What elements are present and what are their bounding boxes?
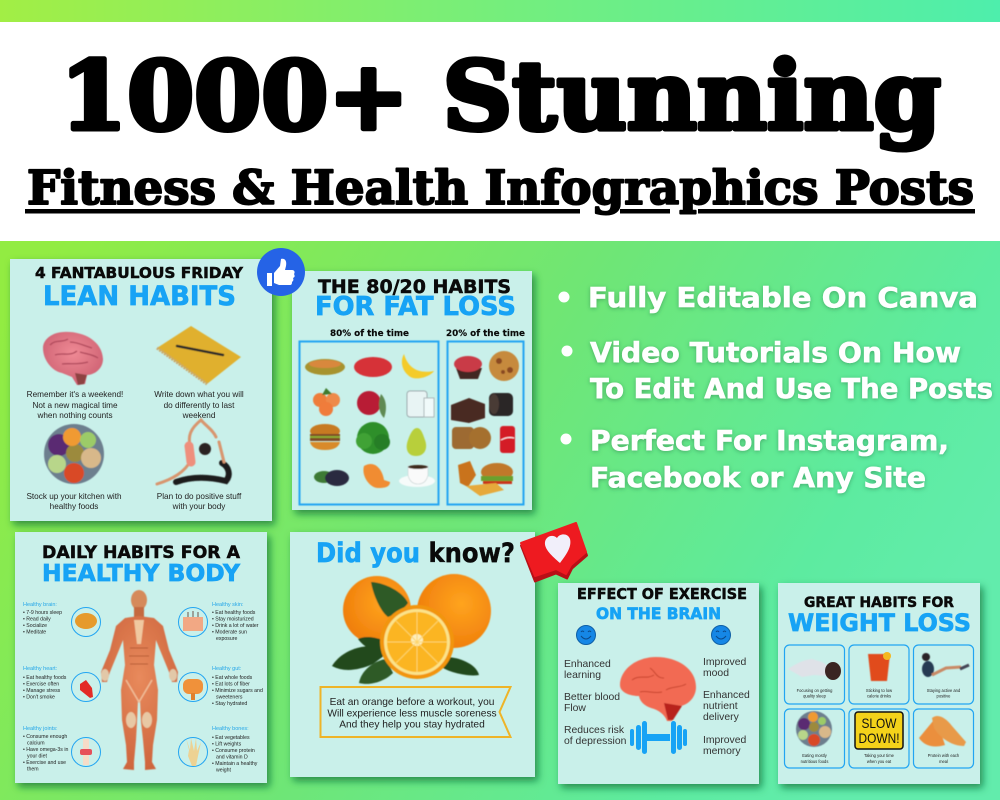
bullet: perfect for instagram: Perfect For Instagram,	[590, 424, 949, 457]
icon: joint circle	[72, 738, 100, 766]
card: nutritious foods: Eating mostly	[802, 753, 828, 758]
icon: right smiley	[712, 626, 730, 644]
text: stock kitchen: Stock up your kitchen with	[26, 492, 122, 501]
bullet: video tutorials	[562, 336, 993, 405]
text: positive stuff: with your body	[172, 502, 226, 511]
heading: lean habits: LEAN HABITS	[43, 281, 236, 312]
card: quality sleep: Focusing on getting	[797, 688, 833, 693]
icon: healthy plate	[44, 424, 104, 484]
text: write down: do differently to last	[164, 401, 235, 410]
text: healthy brain: Healthy brain:	[23, 602, 57, 608]
text: left benefits: of depression	[564, 736, 627, 747]
text: left benefits: Better blood	[564, 692, 620, 703]
card: slow down: Taking your time	[864, 753, 895, 758]
text: healthy gut: • Eat lots of fiber	[212, 682, 250, 688]
bullet: canva: Fully Editable On Canva	[588, 281, 978, 314]
text: write down: Write down what you will	[154, 390, 244, 399]
text: healthy bones: • Eat vegetables	[212, 735, 250, 741]
text: positive stuff	[157, 492, 242, 511]
icon: skin circle	[178, 608, 208, 636]
text: right benefits: memory	[703, 746, 741, 757]
sign: slow down	[855, 712, 903, 749]
text: write down: weekend	[182, 411, 216, 420]
heading: healthy body: HEALTHY BODY	[42, 561, 240, 587]
text: healthy gut: • Stay hydrated	[212, 701, 247, 707]
text: healthy joints: calcium	[27, 740, 45, 746]
image: oranges	[332, 574, 491, 684]
panel: did you know	[290, 532, 535, 777]
text: left benefits: Flow	[564, 703, 586, 714]
white title banner	[0, 22, 1000, 241]
bullet: perfect for instagram: Facebook or Any Site	[590, 461, 926, 494]
heading: daily habits: DAILY HABITS FOR A	[42, 543, 241, 563]
background gradient	[0, 240, 1000, 800]
callout: orange fact ribbon: Eat an orange before a workout, you	[330, 697, 494, 708]
bullet list: features	[558, 281, 993, 494]
icon: dumbbell	[630, 721, 687, 754]
callout: orange fact ribbon	[320, 687, 510, 737]
callout: orange fact ribbon: Will experience less muscle soreness	[327, 708, 497, 720]
icon: red brain	[620, 657, 696, 721]
icon: gut circle	[178, 672, 208, 702]
text: healthy joints: your diet	[27, 754, 47, 760]
text: positive stuff: Plan to do positive stuff	[157, 492, 242, 501]
text: healthy skin: • Moderate sun	[212, 630, 247, 636]
heading: weight loss: WEIGHT LOSS	[788, 609, 971, 637]
text: right benefits: Enhanced	[703, 690, 750, 701]
text: healthy bones: • Maintain a healthy	[212, 761, 258, 767]
text: left benefits: Reduces risk	[564, 725, 625, 736]
text: left benefits	[564, 659, 627, 747]
text: healthy joints: • Exercise and use	[23, 760, 66, 766]
icon: pink brain	[43, 332, 103, 385]
bullet: video tutorials: Video Tutorials On How	[590, 336, 961, 369]
text: right benefits: Improved	[703, 657, 747, 668]
text: healthy brain: • 7-9 hours sleep	[23, 610, 62, 616]
bullet: perfect for instagram	[560, 424, 949, 494]
text: weekend reminder: when nothing counts	[36, 411, 113, 420]
icon: brain circle	[72, 608, 100, 636]
text: healthy bones: • Consume protein	[212, 748, 255, 754]
card: protein each meal: Protein with each	[928, 753, 960, 758]
heading: great habits for: GREAT HABITS FOR	[804, 595, 954, 611]
text: healthy gut: • Eat whole foods	[212, 675, 253, 681]
text: healthy joints: • Consume enough	[23, 734, 67, 740]
text: healthy bones: • Lift weights	[212, 742, 242, 748]
text: healthy skin: • Eat healthy foods	[212, 610, 256, 616]
text: healthy brain: • Read daily	[23, 616, 51, 622]
label: 20 percent: 20% of the time	[446, 329, 525, 339]
text: write down	[154, 390, 244, 420]
panel: healthy body	[15, 532, 267, 783]
text: healthy skin: exposure	[216, 636, 237, 642]
card: quality sleep: quality sleep	[803, 694, 827, 698]
heading: the 80/20 habits: THE 80/20 HABITS	[318, 276, 511, 298]
text: healthy heart: • Don't smoke	[23, 694, 55, 700]
panel: 80/20 habits	[292, 271, 532, 510]
heading: did you know: Did you know?	[316, 538, 515, 569]
card: quality sleep	[784, 645, 844, 704]
panel: effect of exercise	[558, 583, 759, 784]
text: healthy gut: Healthy gut:	[212, 666, 242, 672]
top gradient strip	[0, 0, 1000, 22]
card: low calorie drinks: Sticking to low	[866, 688, 892, 693]
text: healthy skin: • Drink a lot of water	[212, 623, 259, 629]
text: healthy bones: weight	[216, 768, 232, 774]
panel: weight loss habits	[778, 583, 980, 784]
card: slow down: when you eat	[867, 759, 892, 764]
heading: on the brain: ON THE BRAIN	[596, 604, 721, 623]
title: 1000+ Stunning	[60, 41, 941, 152]
label: 80 percent: 80% of the time	[330, 329, 409, 339]
text: right benefits: mood	[703, 668, 729, 679]
bullet: video tutorials: To Edit And Use The Posts	[590, 372, 993, 405]
text: right benefits: Improved	[703, 735, 747, 746]
card: slow down	[849, 709, 909, 768]
callout: orange fact ribbon: And they help you stay hydrated	[339, 720, 485, 730]
text: healthy skin	[212, 602, 259, 642]
text: healthy joints	[23, 726, 68, 772]
text: weekend reminder	[27, 390, 123, 420]
text: healthy brain: • Meditate	[23, 630, 46, 636]
text: weekend reminder: Remember it's a weekend!	[27, 390, 123, 399]
text: healthy bones: Healthy bones:	[212, 726, 249, 732]
panel: lean habits	[10, 259, 272, 521]
card: nutritious foods	[784, 709, 844, 768]
card: low calorie drinks: calorie drinks	[867, 694, 891, 698]
text: healthy heart	[23, 666, 67, 700]
icon: yoga pose	[157, 420, 229, 484]
text: healthy bones: and vitamin D	[216, 754, 248, 760]
icon: bones circle	[178, 738, 208, 766]
text: healthy heart: • Eat healthy foods	[23, 675, 67, 681]
text: left benefits: Enhanced	[564, 659, 611, 670]
text: left benefits: learning	[564, 670, 601, 681]
card: low calorie drinks	[849, 645, 909, 704]
sign: slow down: DOWN!	[858, 730, 900, 746]
text: healthy skin: • Stay moisturized	[212, 616, 254, 622]
text: healthy brain	[23, 602, 62, 636]
text: healthy brain: • Socialize	[23, 623, 47, 629]
text: right benefits	[703, 657, 750, 757]
text: healthy joints: Healthy joints:	[23, 726, 58, 732]
text: stock kitchen	[26, 492, 122, 511]
text: healthy bones	[212, 726, 258, 774]
text: healthy skin: Healthy skin:	[212, 602, 244, 608]
figure: muscular body	[101, 590, 178, 770]
heading: effect of exercise: EFFECT OF EXERCISE	[577, 585, 747, 603]
text: right benefits: delivery	[703, 712, 740, 723]
box: occasional foods	[448, 342, 524, 504]
text: healthy gut: • Minimize sugars and	[212, 688, 263, 694]
text: weekend reminder: Not a new magical time	[32, 401, 118, 410]
box: healthy foods	[300, 342, 438, 504]
card: protein each meal: meal	[939, 759, 948, 764]
text: healthy gut: sweeteners	[216, 694, 243, 700]
text: right benefits: nutrient	[703, 701, 738, 712]
sign: slow down: SLOW	[862, 715, 897, 731]
subtitle underline	[25, 209, 975, 214]
icon: heart circle	[72, 672, 100, 702]
card: active and positive	[914, 645, 974, 704]
subtitle: Fitness & Health Infographics Posts	[27, 161, 974, 216]
icon: left smiley	[576, 626, 596, 644]
text: healthy heart: • Exercise often	[23, 682, 59, 688]
heading: 4 fantabulous friday: 4 FANTABULOUS FRIDAY	[35, 264, 244, 282]
icon: yellow notebook	[157, 326, 241, 384]
text: healthy joints: them	[27, 766, 39, 772]
text: healthy heart: • Manage stress	[23, 688, 61, 694]
text: stock kitchen: healthy foods	[50, 502, 98, 511]
icon: red heart notification	[521, 523, 587, 582]
text: healthy joints: • Have omega-3s in	[23, 747, 68, 753]
card: active and positive: Staying active and	[927, 688, 961, 693]
card: nutritious foods: nutritious foods	[801, 759, 828, 764]
text: healthy heart: Healthy heart:	[23, 666, 58, 672]
text: healthy gut	[212, 666, 263, 707]
icon: facebook like badge	[257, 248, 305, 296]
card: protein each meal	[914, 709, 974, 768]
card: active and positive: positive	[937, 694, 951, 698]
heading: for fat loss: FOR FAT LOSS	[315, 292, 516, 322]
